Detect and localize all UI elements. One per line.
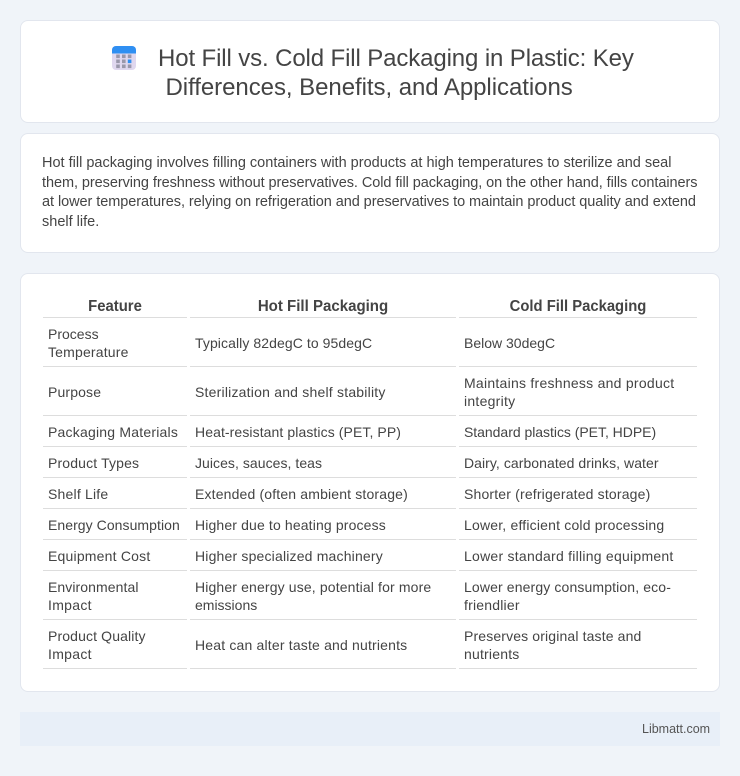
text: Temperature — [48, 344, 129, 360]
text: Purpose — [48, 384, 101, 400]
title line 1: Hot Fill vs. Cold Fill Packaging in Plastic: Key — [158, 45, 634, 72]
footer bar — [20, 712, 720, 746]
intro line 2: them, preserving freshness without preservatives. Cold fill packaging, on the other hand, fills containers — [42, 175, 697, 191]
text: Energy Consumption — [48, 517, 180, 533]
text: friendlier — [464, 597, 520, 613]
row: Energy Consumption — [48, 517, 664, 533]
panel: title header — [20, 20, 720, 123]
text: Impact — [48, 597, 92, 613]
text: emissions — [195, 597, 257, 613]
text: Heat-resistant plastics (PET, PP) — [195, 424, 401, 440]
text: Dairy, carbonated drinks, water — [464, 455, 659, 471]
row: Process Temperature — [48, 326, 555, 360]
text: Higher due to heating process — [195, 517, 386, 533]
text: Product Quality — [48, 628, 146, 644]
row: Shelf Life — [48, 486, 650, 502]
row: Equipment Cost — [48, 548, 674, 564]
text: Juices, sauces, teas — [195, 455, 322, 471]
intro line 3: at lower temperatures, relying on refrigeration and preservatives to maintain product quality and extend — [42, 194, 696, 210]
row: Purpose — [48, 375, 674, 409]
row: Environmental Impact — [48, 579, 671, 613]
text: Shorter (refrigerated storage) — [464, 486, 650, 502]
row: Packaging Materials — [48, 424, 656, 440]
text: Environmental — [48, 579, 139, 595]
text: Below 30degC — [464, 335, 555, 351]
text: Shelf Life — [48, 486, 108, 502]
icon: calendar — [112, 46, 136, 70]
text: Standard plastics (PET, HDPE) — [464, 424, 656, 440]
text: Sterilization and shelf stability — [195, 384, 386, 400]
text: nutrients — [464, 646, 520, 662]
text: Typically 82degC to 95degC — [195, 335, 372, 351]
text: Equipment Cost — [48, 548, 150, 564]
intro line 4: shelf life. — [42, 214, 99, 230]
text: integrity — [464, 393, 515, 409]
footer text: Libmatt.com: Libmatt.com — [642, 722, 710, 736]
row: Product Types — [48, 455, 659, 471]
text: Packaging Materials — [48, 424, 178, 440]
text: Extended (often ambient storage) — [195, 486, 408, 502]
panel: comparison table — [20, 273, 720, 692]
text: Impact — [48, 646, 92, 662]
table header: Cold Fill Packaging: Cold Fill Packaging — [510, 298, 646, 315]
panel: introduction — [20, 133, 720, 253]
text: Heat can alter taste and nutrients — [195, 637, 407, 653]
text: Higher specialized machinery — [195, 548, 383, 564]
text: Preserves original taste and — [464, 628, 641, 644]
text: Product Types — [48, 455, 139, 471]
title line 2: Differences, Benefits, and Applications — [166, 74, 573, 101]
table header: Hot Fill Packaging: Hot Fill Packaging — [258, 298, 388, 315]
text: Lower energy consumption, eco- — [464, 579, 671, 595]
text: Lower, efficient cold processing — [464, 517, 664, 533]
intro line 1: Hot fill packaging involves filling containers with products at high temperatures to sterilize and seal — [42, 155, 671, 171]
table header: Feature: Feature — [88, 298, 142, 315]
text: Process — [48, 326, 99, 342]
text: Maintains freshness and product — [464, 375, 674, 391]
text: Higher energy use, potential for more — [195, 579, 431, 595]
row: Product Quality Impact — [48, 628, 641, 662]
text: Lower standard filling equipment — [464, 548, 674, 564]
